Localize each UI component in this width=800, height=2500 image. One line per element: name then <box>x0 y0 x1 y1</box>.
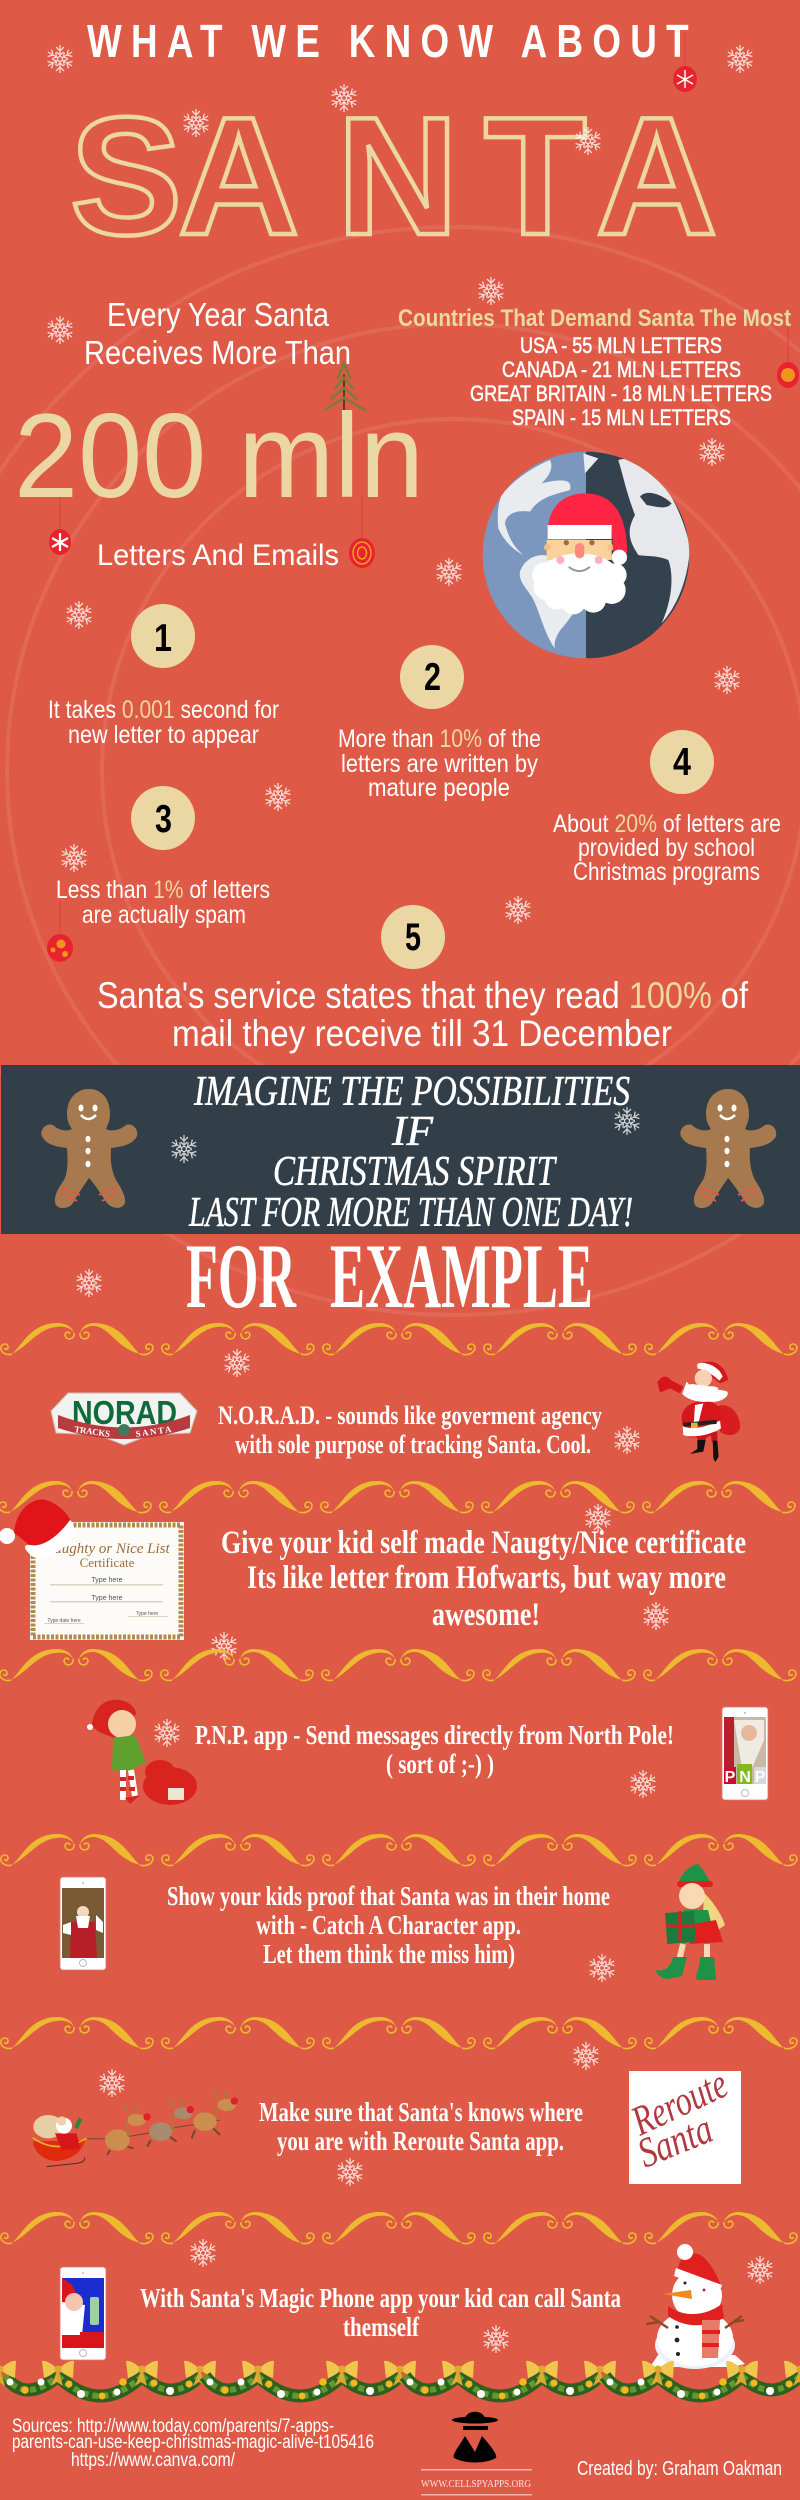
icon: PNP phone <box>722 1707 768 1800</box>
row: certificate <box>0 1500 746 1640</box>
fact 4 <box>553 730 781 886</box>
text: NORAD description <box>218 1401 602 1459</box>
big number: 200 mln: 200 mln <box>14 389 424 523</box>
banner text: CHRISTMAS SPIRIT <box>273 1149 557 1195</box>
icon: certificate: Type here <box>91 1577 123 1584</box>
text: sources: Sources: http://www.today.com/parents/7-apps- <box>12 2416 334 2437</box>
fact 4: About 20% of letters are <box>553 810 781 838</box>
left heading: yearly letters <box>84 296 351 371</box>
fact 1 <box>48 604 279 749</box>
ornament: white burst ball <box>49 496 71 555</box>
fact 3: Less than 1% of letters <box>56 876 270 904</box>
icon: certificate <box>30 1522 184 1640</box>
fact 1: 1 <box>154 617 172 660</box>
text: certificate description: awesome! <box>432 1597 540 1633</box>
fact 3: are actually spam <box>82 901 246 929</box>
ornament: snowflake ball <box>673 32 697 92</box>
icon: sleigh and reindeer <box>33 2089 238 2167</box>
heading: for example: EXAMPLE <box>330 1225 593 1327</box>
icon: Catch A Character phone <box>60 1877 106 1970</box>
text: Catch A Character description: Let them think the miss him) <box>263 1939 515 1969</box>
icon: left gingerbread man <box>41 1089 137 1208</box>
fact 4: 4 <box>673 741 691 784</box>
text: Reroute description: you are with Reroute Santa app. <box>277 2126 564 2156</box>
text: Catch A Character description <box>167 1881 610 1969</box>
heading: for example: FOR <box>186 1225 297 1327</box>
left heading: yearly letters: Every Year Santa <box>107 296 330 333</box>
fact 3: 3 <box>155 798 172 841</box>
fact 2: letters are written by <box>341 750 538 778</box>
panel: countries list <box>398 305 791 430</box>
panel: countries list: USA - 55 MLN LETTERS <box>520 333 722 358</box>
icon: globe with Santa face <box>483 452 690 658</box>
row: Reroute Santa <box>33 2061 741 2184</box>
fact 4: Christmas programs <box>573 858 760 886</box>
fact 2: mature people <box>368 774 510 802</box>
panel: countries list: SPAIN - 15 MLN LETTERS <box>512 405 731 430</box>
row: NORAD <box>51 1362 740 1462</box>
text: Magic Phone description <box>140 2283 621 2342</box>
icon: certificate: Type date here <box>47 1618 81 1624</box>
text: Catch A Character description: Show your kids proof that Santa was in their home <box>167 1881 610 1911</box>
caption: letters and emails: Letters And Emails <box>97 539 339 572</box>
icon: snowman <box>646 2244 745 2369</box>
ornament: concentric ring ball <box>349 496 375 568</box>
icon: certificate: Naughty or Nice List <box>43 1541 171 1557</box>
banner text <box>188 1069 633 1236</box>
row: Magic Phone <box>60 2244 745 2369</box>
banner text: IMAGINE THE POSSIBILITIES <box>193 1069 630 1115</box>
banner snowflakes <box>170 1107 641 1163</box>
fact 4: provided by school <box>578 834 755 862</box>
text: NORAD description: N.O.R.A.D. - sounds like goverment agency <box>218 1401 602 1430</box>
left heading: yearly letters: Receives More Than <box>84 334 351 371</box>
icon: Reroute Santa logo: Reroute <box>624 2061 735 2145</box>
panel: countries list: CANADA - 21 MLN LETTERS <box>502 357 741 382</box>
icon: Santa figure <box>657 1362 740 1462</box>
text: PNP description: P.N.P. app - Send messages directly from North Pole! <box>195 1720 674 1750</box>
icon: certificate: Type here <box>91 1595 123 1602</box>
icon: PNP phone: N <box>739 1769 751 1786</box>
fact 2 <box>338 645 541 802</box>
icon: Magic Phone <box>60 2267 106 2360</box>
icon: PNP phone: P <box>725 1769 736 1786</box>
text: PNP description <box>195 1720 674 1779</box>
logo: cell spy apps: WWW.CELLSPYAPPS.ORG <box>421 2478 531 2490</box>
text: NORAD description: with sole purpose of tracking Santa. Cool. <box>235 1430 591 1459</box>
row: Catch A Character <box>60 1864 725 1980</box>
icon: NORAD logo <box>51 1393 197 1445</box>
text: PNP description: ( sort of ;-) ) <box>386 1749 494 1779</box>
fact 5: mail they receive till 31 December <box>172 1013 672 1054</box>
dividers <box>0 1323 797 2244</box>
fact 1: new letter to appear <box>68 721 259 749</box>
fact 3 <box>56 786 270 929</box>
banner text: IF <box>391 1109 433 1155</box>
icon: NORAD logo: NORAD <box>72 1394 177 1431</box>
banner text: LAST FOR MORE THAN ONE DAY! <box>188 1190 633 1236</box>
title: SANTA: SANTA <box>70 82 717 270</box>
text: Reroute description: Make sure that Santa's knows where <box>259 2097 583 2127</box>
fact 5: 5 <box>405 916 421 959</box>
text: sources: parents-can-use-keep-christmas-magic-alive-t105416 <box>12 2432 374 2453</box>
ornament: dotted ball <box>47 900 73 962</box>
heading: for example <box>186 1225 593 1327</box>
icon: elf with sack <box>87 1700 197 1805</box>
fact 5: Santa's service states that they read 100% of <box>97 975 749 1016</box>
text: Catch A Character description: with - Catch A Character app. <box>256 1910 521 1940</box>
icon: small tree <box>325 363 365 413</box>
icon: spy <box>452 2412 498 2462</box>
logo: cell spy apps <box>421 2412 532 2496</box>
text: certificate description <box>221 1525 746 1633</box>
icon: elf with gift <box>656 1864 725 1980</box>
fact 5 <box>97 905 749 1054</box>
garland <box>0 2361 800 2400</box>
text: Reroute description <box>259 2097 583 2156</box>
icon: NORAD logo: TRACKS <box>74 1424 111 1439</box>
ornament: orange star ball <box>777 328 799 388</box>
text: sources: https://www.canva.com/ <box>71 2450 236 2471</box>
title line: WHAT WE KNOW ABOUT <box>87 15 689 67</box>
panel: imagine the possibilities banner <box>1 1065 800 1236</box>
fact 2: 2 <box>424 656 441 699</box>
icon: PNP phone: P <box>755 1769 766 1786</box>
icon: Reroute Santa logo <box>624 2061 741 2184</box>
text: sources <box>12 2416 374 2471</box>
icon: Santa hat <box>0 1500 74 1558</box>
text: Magic Phone description: themself <box>343 2312 420 2342</box>
fact 2: More than 10% of the <box>338 725 541 753</box>
row: P.N.P. app <box>87 1700 768 1805</box>
background concentric rings <box>0 227 800 1315</box>
icon: right gingerbread man <box>680 1089 776 1208</box>
icon: certificate: Certificate <box>80 1555 135 1570</box>
icon: Reroute Santa logo: Santa <box>632 2106 719 2177</box>
text: Magic Phone description: With Santa's Magic Phone app your kid can call Santa <box>140 2283 621 2313</box>
icon: NORAD logo: SANTA <box>135 1424 172 1439</box>
icon: certificate: Type here <box>136 1611 158 1617</box>
fact 1: It takes 0.001 second for <box>48 696 279 724</box>
